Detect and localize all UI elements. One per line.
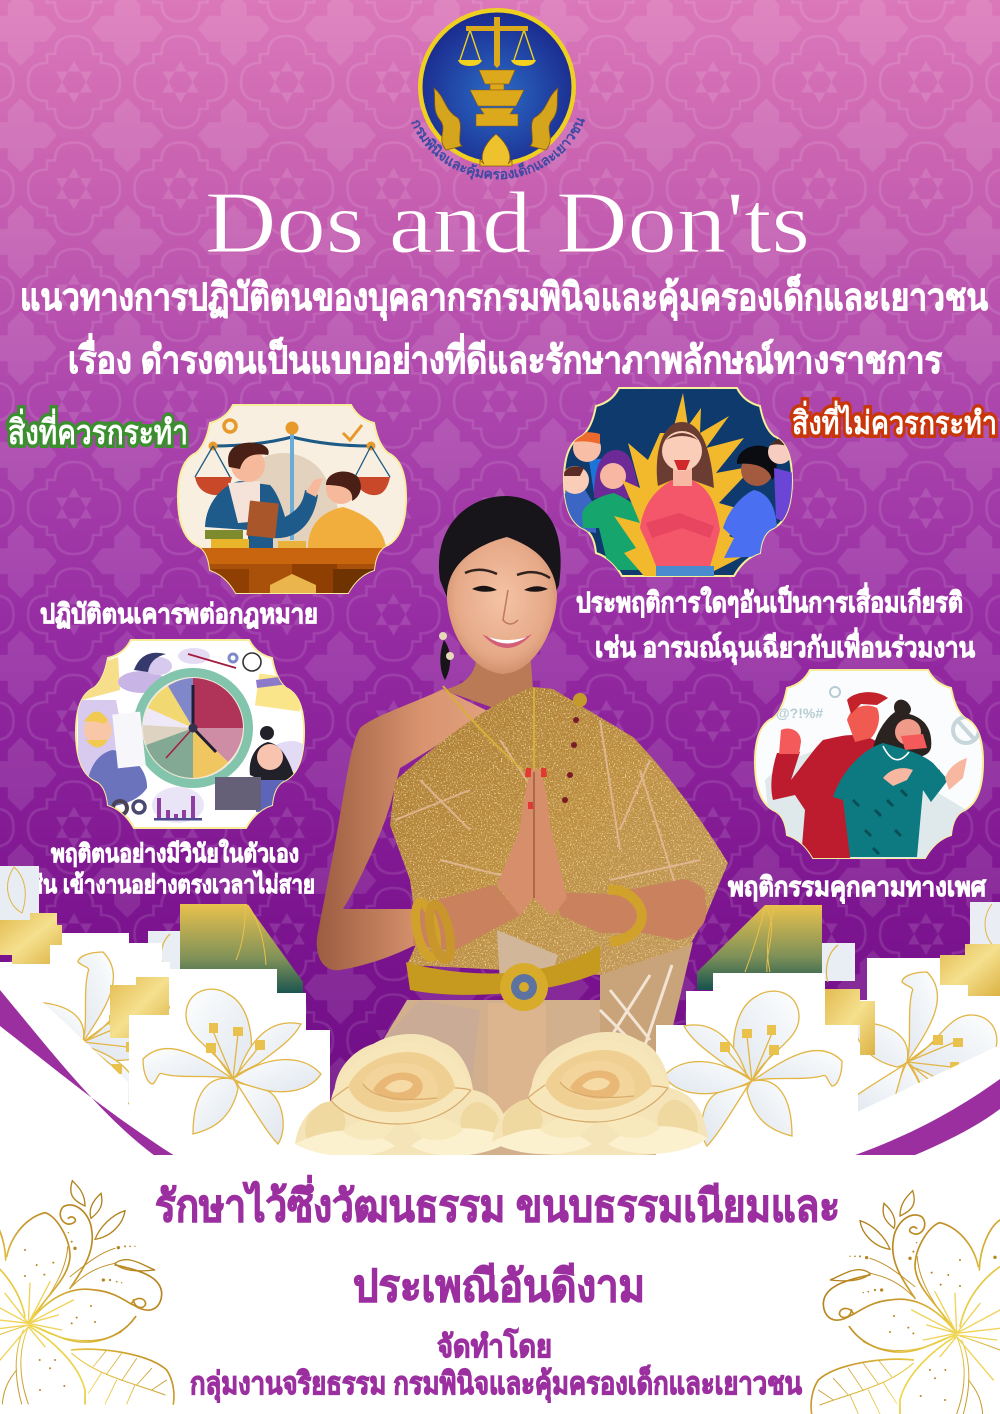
lotus emblem xyxy=(480,134,512,166)
roses xyxy=(295,1032,708,1158)
hair xyxy=(439,496,561,610)
closing message line 1: รักษาไว้ซึ่งวัฒนธรรม ขนบธรรมเนียมและ xyxy=(155,1175,840,1231)
left green-gold leaf xyxy=(180,904,303,995)
left forearm xyxy=(413,885,520,950)
folded cloth at waist xyxy=(497,930,558,985)
logo: กรมพินิจและคุ้มครองเด็กและเยาวชน xyxy=(411,118,585,180)
scales of justice xyxy=(458,17,536,68)
bottom white area xyxy=(0,1155,1000,1414)
left pale bud xyxy=(0,866,39,923)
title: Dos and Don'ts xyxy=(205,175,810,272)
panel: obey the law xyxy=(178,405,406,593)
right inner gold patch xyxy=(825,989,875,1055)
praying hands xyxy=(497,768,567,916)
organizer heading: จัดทำโดย xyxy=(437,1328,552,1364)
right white wedge xyxy=(857,1045,1000,1160)
skirt xyxy=(370,1000,670,1155)
lotus pedestal xyxy=(470,70,524,126)
right purple ribbon xyxy=(841,1079,1000,1160)
panel: angry coworker xyxy=(561,388,794,576)
label: do: สิ่งที่ควรกระทำ xyxy=(8,408,188,452)
logo xyxy=(411,8,585,180)
panel: discipline clock xyxy=(76,640,304,828)
right front lily box xyxy=(656,973,858,1160)
left white wedge xyxy=(0,962,128,1160)
panel: harassment xyxy=(755,670,983,858)
left purple ribbon xyxy=(0,990,175,1156)
naga right xyxy=(530,88,558,150)
right green-gold leaf xyxy=(697,905,822,990)
neck xyxy=(443,650,533,712)
woman in Thai dress xyxy=(317,496,728,1155)
organizer name: กลุ่มงานจริยธรรม กรมพินิจและคุ้มครองเด็กและเยาวชน xyxy=(190,1364,802,1403)
caption: discipline line 1: พฤติตนอย่างมีวินัยในตัวเอง xyxy=(51,838,299,868)
panel: harassment: @?!%# xyxy=(776,705,823,721)
blouse sash xyxy=(390,687,728,975)
gold flower: right corner xyxy=(811,1191,1000,1414)
left arm and shoulder xyxy=(317,689,510,970)
closing message line 2: ประเพณีอันดีงาม xyxy=(353,1262,645,1311)
gold flower: left corner xyxy=(0,1181,174,1404)
necklace xyxy=(443,686,534,770)
right gold patch xyxy=(940,944,1000,996)
left back lily xyxy=(18,952,173,1130)
right back lily xyxy=(842,972,997,1150)
left white floral stack xyxy=(0,866,330,1160)
left front lily box xyxy=(129,969,330,1160)
right white floral stack xyxy=(656,902,1000,1160)
right pale bud xyxy=(970,902,1000,950)
left inner gold patch xyxy=(110,977,169,1038)
face xyxy=(447,537,557,674)
right forearm xyxy=(556,879,706,940)
left gold patch xyxy=(0,913,62,964)
belt xyxy=(406,945,600,995)
bangles xyxy=(411,890,642,961)
caption: obey the law: ปฏิบัติตนเคารพต่อกฎหมาย xyxy=(40,599,318,629)
caption: discipline line 2: เช่น เข้างานอย่างตรงเวลาไม่สาย xyxy=(22,869,315,899)
hair flowers and earring xyxy=(440,640,450,680)
naga left xyxy=(434,88,462,150)
